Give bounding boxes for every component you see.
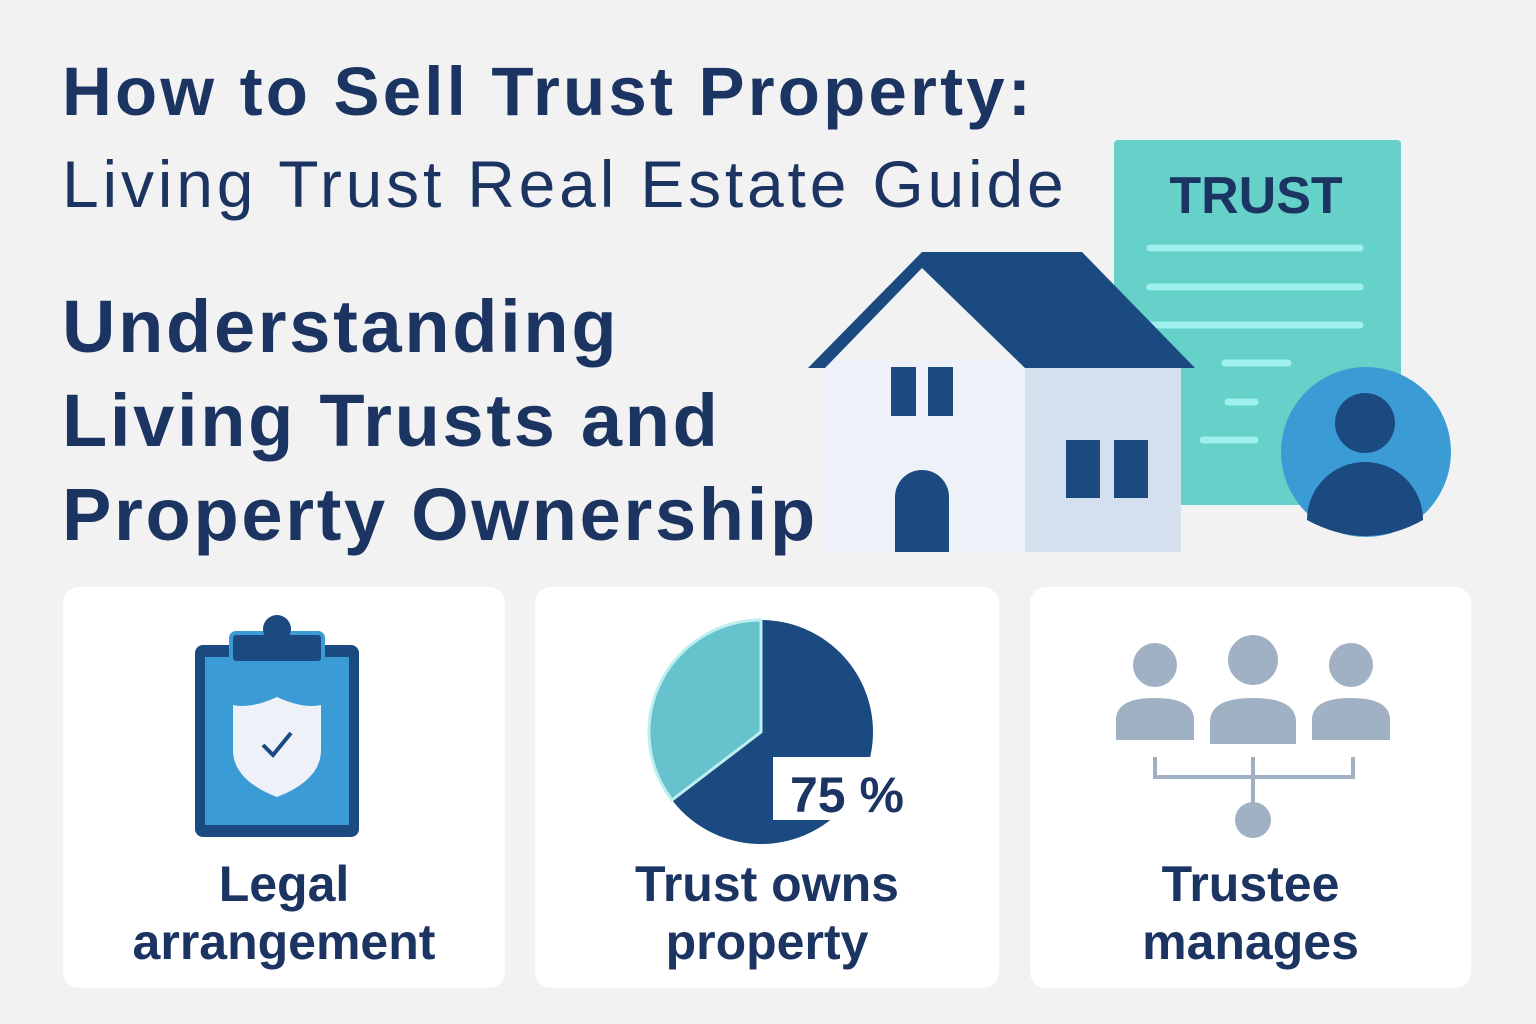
label: property	[666, 914, 868, 970]
card: trust owns property	[535, 587, 999, 988]
label: Trustee	[1162, 856, 1339, 912]
icon: person	[1281, 367, 1451, 537]
pie chart 75%	[648, 618, 904, 844]
heading: Understanding	[62, 285, 619, 368]
icon: clipboard shield	[195, 615, 359, 837]
label	[133, 856, 435, 970]
illustration: house, trust document, person	[808, 140, 1451, 552]
heading: Living Trusts and	[62, 379, 721, 462]
label: Trust owns	[635, 856, 899, 912]
icon: trust document	[1114, 140, 1401, 505]
icon: house	[808, 252, 1195, 552]
pie chart 75%: 75 %	[790, 767, 904, 823]
icon: trust document: TRUST	[1169, 167, 1343, 225]
heading	[62, 285, 818, 556]
card: trustee manages	[1030, 587, 1471, 988]
label: arrangement	[133, 914, 435, 970]
label: Legal	[219, 856, 349, 912]
label	[1142, 856, 1359, 970]
heading: Property Ownership	[62, 473, 818, 556]
label: manages	[1142, 914, 1359, 970]
icon: people hierarchy	[1116, 635, 1390, 838]
card: legal arrangement	[63, 587, 505, 988]
subtitle: Living Trust Real Estate Guide	[62, 147, 1067, 221]
label	[635, 856, 899, 970]
title: How to Sell Trust Property:	[62, 53, 1034, 130]
